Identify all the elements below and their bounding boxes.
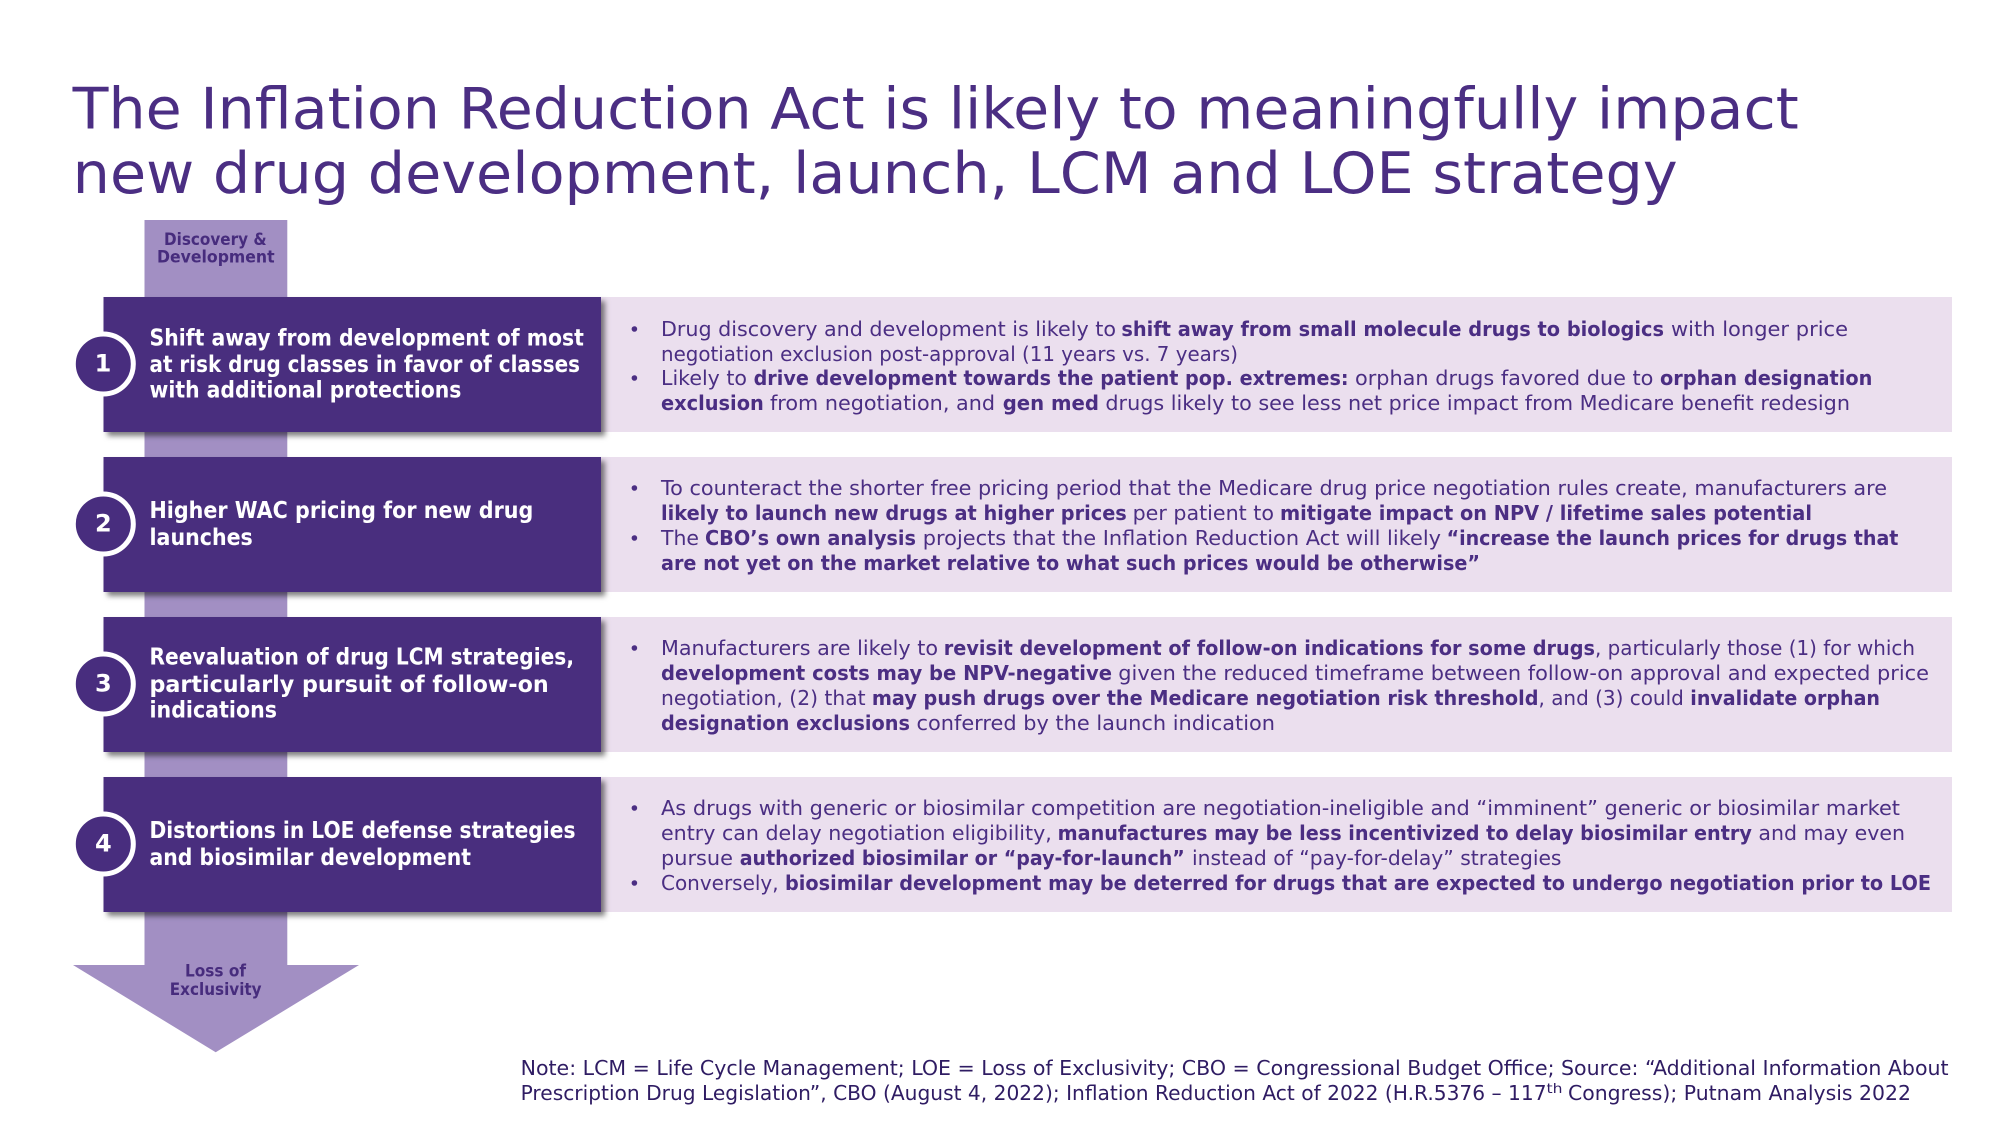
bullet text: row 1: drugs likely to see less net price impact from Medicare benefit redesign: [1105, 391, 1850, 415]
bullet text: row 4: pursue: [661, 846, 733, 870]
number badge 2: 2: [95, 510, 112, 538]
header box: row 2: Higher WAC pricing for new drug: [150, 498, 533, 524]
bullet text: row 1: orphan designation: [1660, 366, 1872, 390]
bullet text: row 2: mitigate impact on NPV / lifetime sales potential: [1280, 501, 1812, 525]
header box: row 3: Reevaluation of drug LCM strategies,: [150, 644, 574, 670]
bullet text: row 2: “increase the launch prices for drugs that: [1447, 526, 1899, 550]
bullet text: row 1: gen med: [1003, 391, 1099, 415]
timeline arrow: discovery to loss of exclusivity: Discovery &: [164, 230, 267, 249]
footnote: Note: LCM = Life Cycle Management; LOE = Loss of Exclusivity; CBO = Congressional Budget Office; Source: “Additional Information About: [521, 1056, 1949, 1080]
bullet text: row 2: projects that the Inflation Reduction Act will likely: [923, 526, 1441, 550]
header box: row 3: particularly pursuit of follow-on: [150, 672, 549, 698]
panel: row 1 detail: [601, 297, 1952, 432]
bullet text: row 1: with longer price: [1671, 317, 1848, 341]
bullet text: row 4: As drugs with generic or biosimilar competition are negotiation-ineligible and “imminent” generic or biosimilar market: [661, 796, 1900, 820]
bullet text: row 2: per patient to: [1133, 501, 1274, 525]
row 1: [73, 297, 1952, 432]
bullet text: row 1: exclusion: [661, 391, 764, 415]
header box: row 2: launches: [150, 525, 253, 551]
panel: row 4 detail: [601, 777, 1952, 912]
number badge 4: [73, 814, 133, 874]
row 4: [73, 777, 1952, 912]
number badge 3: 3: [95, 670, 112, 698]
title: new drug development, launch, LCM and LOE strategy: [73, 141, 1678, 207]
timeline arrow: discovery to loss of exclusivity: Exclusivity: [170, 980, 262, 999]
bullet text: row 4: biosimilar development may be deterred for drugs that are expected to undergo negotiation prior to LOE: [785, 871, 1931, 895]
footnote: [521, 1056, 1949, 1105]
number badge 1: 1: [95, 350, 111, 378]
bullet text: row 3: development costs may be NPV-negative: [661, 661, 1112, 685]
row 2: [73, 457, 1952, 592]
header box: row 4: and biosimilar development: [150, 845, 471, 871]
bullet text: row 4: authorized biosimilar or “pay-for-launch”: [740, 846, 1185, 870]
row 3: [73, 617, 1952, 752]
footnote: Prescription Drug Legislation”, CBO (August 4, 2022); Inflation Reduction Act of 2022 (H.R.5376 – 117: [521, 1081, 1547, 1105]
bullet text: row 2: likely to launch new drugs at higher prices: [661, 501, 1127, 525]
number badge 1: [73, 334, 133, 394]
header box: row 3: indications: [150, 698, 277, 724]
bullet text: row 3: negotiation, (2) that: [661, 686, 866, 710]
header box: row 1: [73, 297, 601, 432]
bullet text: row 3: Manufacturers are likely to: [661, 636, 938, 660]
header box: row 1: Shift away from development of most: [150, 326, 584, 352]
bullet text: row 3: invalidate orphan: [1690, 686, 1880, 710]
bullet text: row 2: are not yet on the market relative to what such prices would be otherwise”: [661, 551, 1480, 575]
number badge 4: 4: [95, 830, 112, 858]
bullet text: row 2: To counteract the shorter free pricing period that the Medicare drug price negotiation rules create, manufacturers are: [660, 476, 1887, 500]
footnote: th: [1546, 1081, 1562, 1097]
header box: row 4: Distortions in LOE defense strategies: [150, 818, 576, 844]
bullet text: row 4: Conversely,: [661, 871, 779, 895]
bullet text: row 4: and may even: [1758, 821, 1905, 845]
bullet text: row 3: may push drugs over the Medicare negotiation risk threshold: [872, 686, 1538, 710]
bullet text: row 2: CBO’s own analysis: [705, 526, 916, 550]
bullet text: row 3: given the reduced timeframe between follow-on approval and expected price: [1118, 661, 1929, 685]
title: [72, 76, 1799, 207]
panel: row 2 detail: [601, 457, 1952, 592]
bullet text: row 4: instead of “pay-for-delay” strategies: [1192, 846, 1562, 870]
bullet text: row 1: orphan drugs favored due to: [1355, 366, 1653, 390]
bullet text: row 3: revisit development of follow-on indications for some drugs: [944, 636, 1595, 660]
bullet text: row 1: shift away from small molecule drugs to biologics: [1121, 317, 1664, 341]
number badge 2: [73, 494, 133, 554]
title: The Inflation Reduction Act is likely to meaningfully impact: [72, 76, 1799, 142]
timeline arrow: discovery to loss of exclusivity: Development: [157, 248, 275, 267]
header box: row 2: [73, 457, 601, 592]
header box: row 3: [73, 617, 601, 752]
bullet text: row 1: Drug discovery and development is likely to: [661, 317, 1116, 341]
header box: row 4: [73, 777, 601, 912]
bullet text: row 3: designation exclusions: [661, 711, 910, 735]
panel: row 3 detail: [601, 617, 1952, 752]
bullet text: row 1: negotiation exclusion post-approval (11 years vs. 7 years): [661, 342, 1238, 366]
header box: row 1: at risk drug classes in favor of classes: [150, 352, 580, 378]
bullet text: row 4: [632, 796, 1931, 895]
bullet text: row 2: [632, 476, 1899, 575]
header box: row 1: with additional protections: [150, 378, 461, 404]
timeline arrow: discovery to loss of exclusivity: [73, 220, 359, 1052]
bullet text: row 4: entry can delay negotiation eligibility,: [661, 821, 1052, 845]
bullet text: row 3: [632, 636, 1929, 735]
bullet text: row 1: drive development towards the patient pop. extremes:: [754, 366, 1349, 390]
bullet text: row 3: , particularly those (1) for which: [1595, 636, 1915, 660]
number badge 3: [73, 654, 133, 714]
bullet text: row 3: , and (3) could: [1538, 686, 1684, 710]
bullet text: row 4: manufactures may be less incentivized to delay biosimilar entry: [1058, 821, 1752, 845]
bullet text: row 1: Likely to: [661, 366, 747, 390]
bullet text: row 1: [632, 317, 1872, 415]
bullet text: row 3: conferred by the launch indication: [916, 711, 1275, 735]
footnote: Congress); Putnam Analysis 2022: [1568, 1081, 1911, 1105]
timeline arrow: discovery to loss of exclusivity: Loss of: [185, 962, 247, 981]
bullet text: row 1: from negotiation, and: [770, 391, 995, 415]
bullet text: row 2: The: [660, 526, 699, 550]
